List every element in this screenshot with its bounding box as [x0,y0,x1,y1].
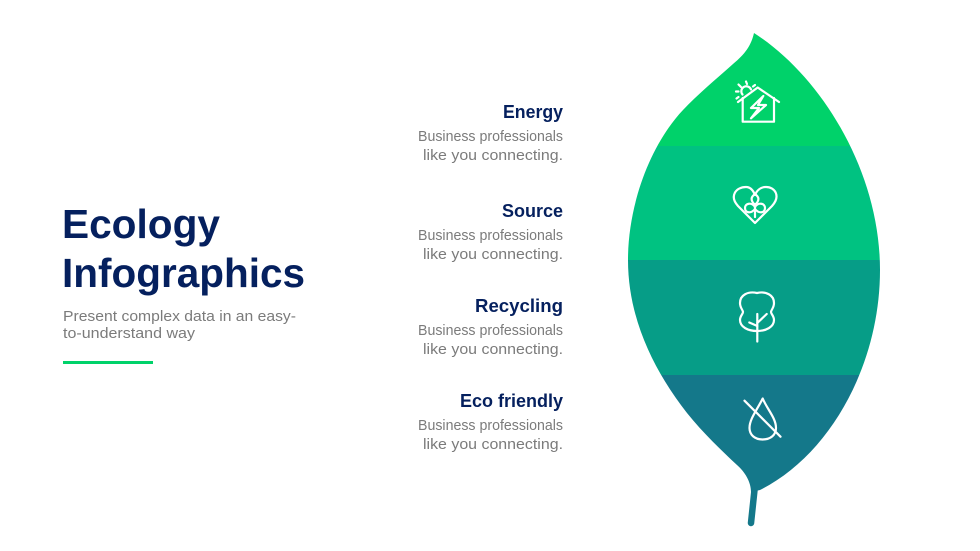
text block: Energy: Energy [503,102,563,122]
text block: Recycling: Business professionals [418,322,563,339]
text block: Recycling: Recycling [475,296,563,316]
subtitle: to-understand way [63,325,196,342]
text block: Eco friendly: like you connecting. [423,436,563,453]
text block: Energy [418,102,563,164]
icon: crossed water drop [744,398,780,440]
text block: Eco friendly: Eco friendly [460,391,563,411]
text block: Source [418,201,563,263]
infographic canvas [63,33,880,526]
text block: Energy: like you connecting. [423,147,563,164]
subtitle [63,308,296,342]
leaf diagram [620,25,890,523]
title: Infographics [62,250,305,296]
leaf colour bands [620,25,890,500]
subtitle: Present complex data in an easy- [63,308,296,325]
text block: Recycling [418,296,563,358]
icon: heart with plant [734,187,776,223]
text block: Recycling: like you connecting. [423,341,563,358]
text block: Source: Business professionals [418,227,563,244]
icon: solar house [736,82,779,122]
title [62,201,305,296]
text block: Eco friendly [418,391,563,453]
icon: tree [740,292,774,342]
text block: Source: Source [502,201,563,221]
text block: Eco friendly: Business professionals [418,417,563,434]
title accent bar [63,361,153,364]
text block: Source: like you connecting. [423,246,563,263]
text block: Energy: Business professionals [418,128,563,145]
leaf stem [751,490,754,523]
title: Ecology [62,201,220,247]
